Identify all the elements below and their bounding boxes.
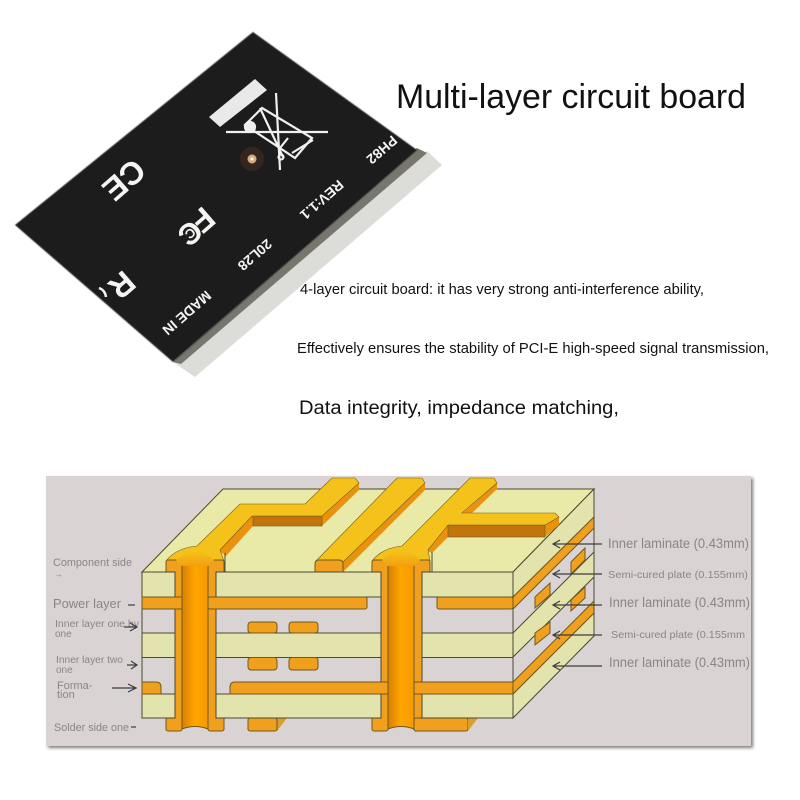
right arrows — [553, 540, 602, 670]
FCC mark: F — [184, 200, 222, 240]
label: formation: Forma- — [57, 680, 93, 692]
top face — [142, 489, 594, 572]
ground layer copper — [142, 682, 513, 694]
via one collars — [166, 560, 224, 731]
label: inner laminate two: Inner laminate (0.43mm) — [609, 595, 750, 610]
label: inner layer one: Inner layer one by — [55, 619, 139, 630]
label: inner layer two, second line: one — [56, 665, 73, 676]
line 3: Data integrity, impedance matching, — [299, 398, 619, 419]
FCC mark: C — [171, 213, 209, 252]
diagram: PCB cross-section — [142, 478, 594, 731]
trace: bent from via one — [166, 478, 359, 572]
via two barrel — [382, 551, 420, 729]
board body — [15, 32, 417, 362]
silk text: 20L28: 20L28 — [235, 236, 275, 274]
front face gaps — [142, 572, 513, 718]
bottom pad and its side — [248, 718, 478, 731]
label: formation, second line: tion — [57, 689, 75, 701]
label: component side: Component side — [53, 557, 132, 569]
FCC mark — [171, 200, 222, 252]
laminate layers, front — [142, 572, 513, 718]
FCC mark: C — [181, 225, 199, 243]
line 2: Effectively ensures the stability of PCI-E high-speed signal transmission, — [297, 340, 769, 357]
label: semi-cured plate one: Semi-cured plate (0.155mm) — [608, 569, 748, 581]
power layer copper — [142, 597, 513, 609]
trace: T from via two — [372, 478, 559, 572]
title: Multi-layer circuit board — [396, 78, 746, 116]
left labels — [53, 557, 139, 734]
icon: gold via — [240, 147, 264, 171]
label: inner layer two: Inner layer two — [56, 655, 123, 666]
label: inner laminate three: Inner laminate (0.43mm) — [609, 655, 750, 670]
inner pads — [248, 622, 318, 670]
silk text: REV:1.1: REV:1.1 — [297, 177, 347, 223]
label: inner layer one, second line: one — [55, 629, 72, 640]
left arrows — [112, 605, 137, 727]
label: solder side: Solder side one — [54, 722, 129, 734]
line 1: 4-layer circuit board: it has very strong anti-interference ability, — [300, 281, 704, 298]
right labels — [608, 536, 750, 670]
label: component arrow: → — [54, 569, 63, 579]
silk text: MADE IN: MADE IN — [159, 288, 215, 338]
via one barrel — [176, 551, 214, 729]
white label block — [209, 79, 267, 127]
RoHS mark, cut off: R — [101, 264, 143, 306]
text block: description — [297, 281, 769, 419]
via two collars — [372, 560, 468, 731]
trace: straight middle — [315, 478, 425, 572]
silk text: PH82: PH82 — [363, 132, 400, 168]
icon: crossed-out bin — [226, 93, 328, 170]
panel: PCB stack-up diagram — [46, 476, 753, 748]
photo: circuit board underside — [15, 32, 442, 377]
CE mark: CE — [95, 152, 153, 208]
label: inner laminate one: Inner laminate (0.43mm) — [608, 536, 749, 551]
right face — [513, 489, 594, 718]
label: semi-cured plate two: Semi-cured plate (0.155mm — [611, 629, 745, 641]
label: power layer: Power layer — [53, 596, 122, 611]
